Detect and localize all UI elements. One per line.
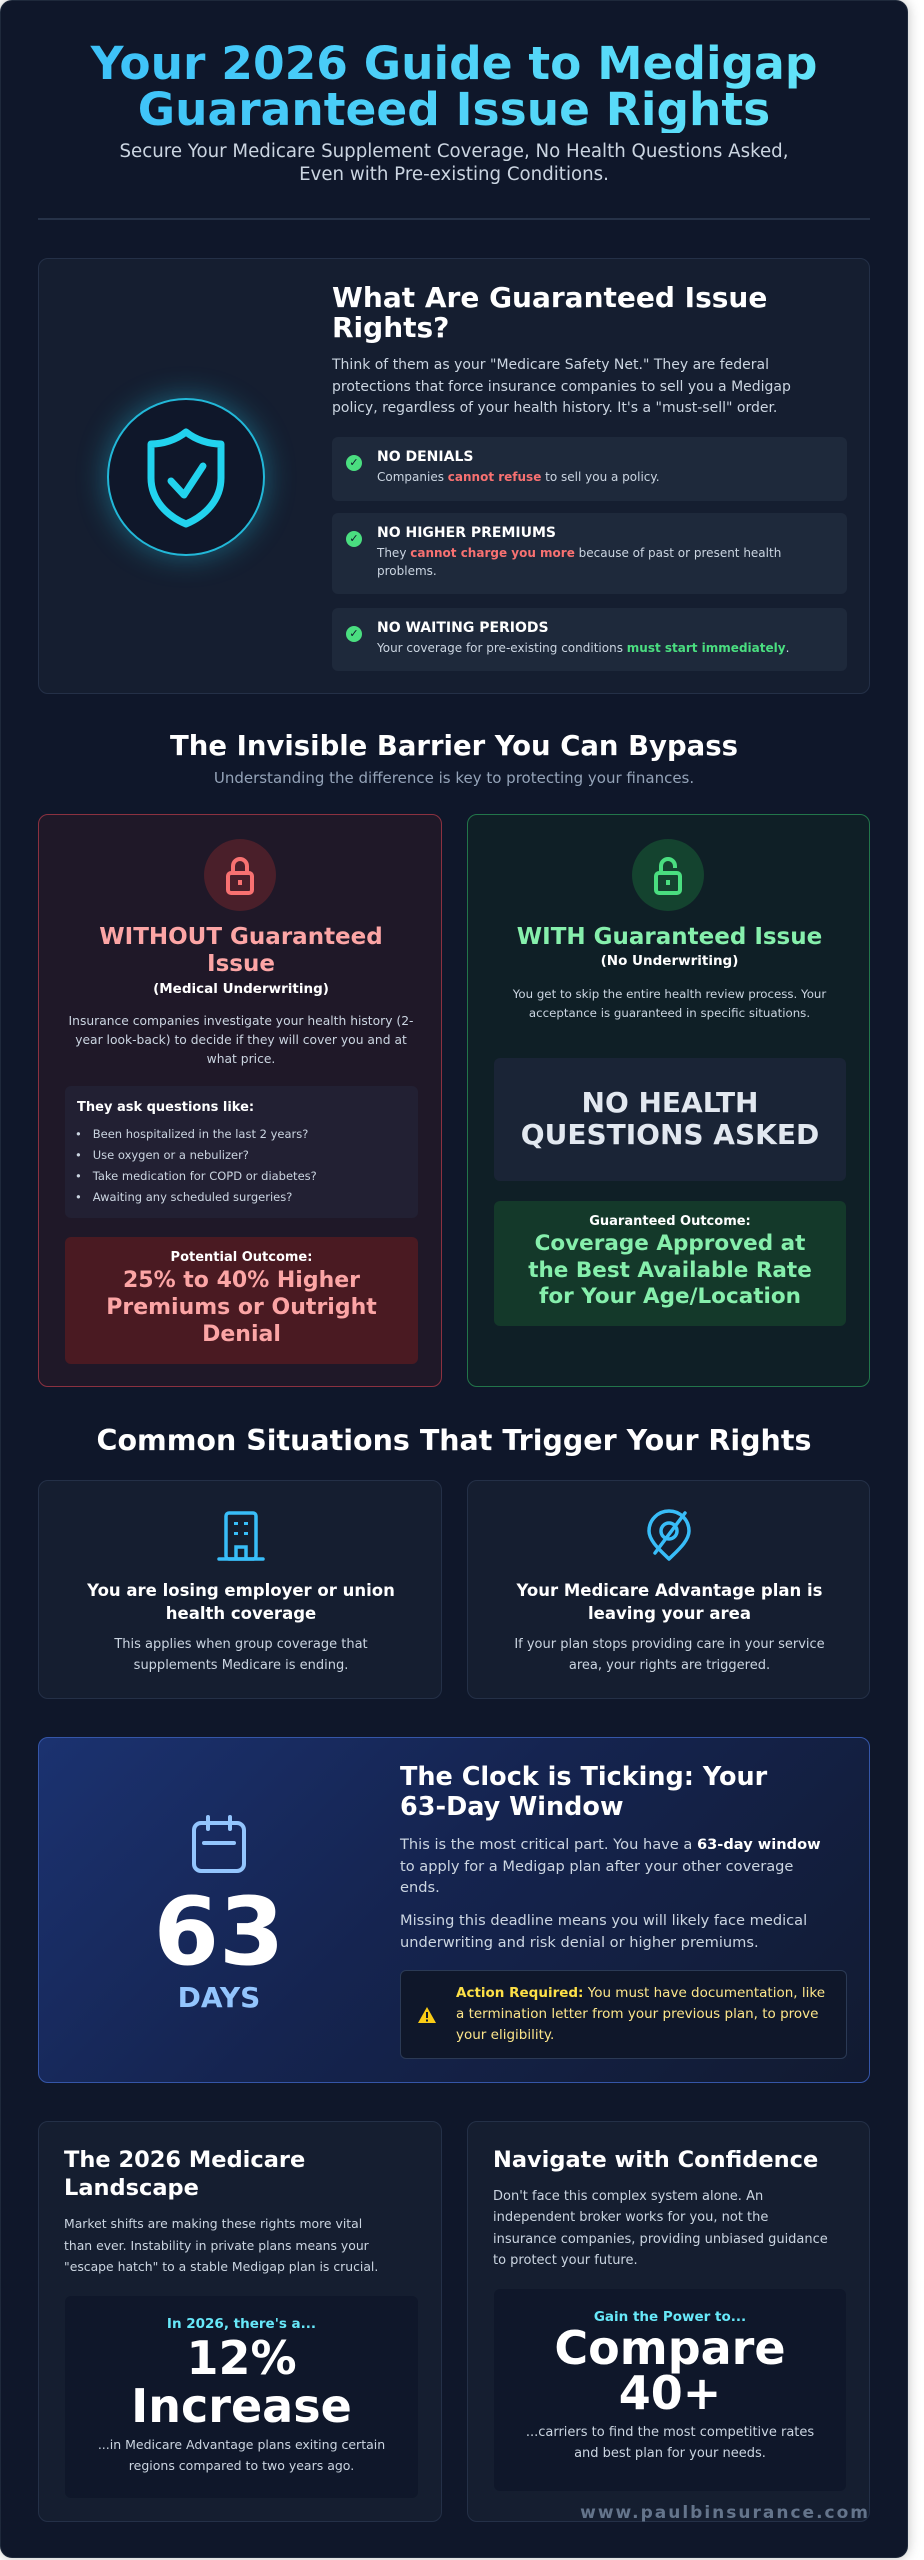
icon: shield <box>107 398 265 556</box>
stat box: 12% increase: ...in Medicare Advantage plans exiting certain <box>98 2437 385 2452</box>
item: no higher premiums: ✓ <box>349 532 359 545</box>
stat box: 12% increase: regions compared to two years ago. <box>129 2458 354 2473</box>
title <box>0 41 908 133</box>
no health questions box: QUESTIONS ASKED <box>521 1118 819 1151</box>
outcome box: Potential Outcome: <box>171 1250 312 1265</box>
icon: location off <box>647 1509 691 1561</box>
text: than ever. Instability in private plans means your <box>64 2238 369 2252</box>
heading: What Are Guaranteed Issue Rights? <box>332 281 767 344</box>
outcome box <box>494 1201 846 1326</box>
big number: 63 <box>154 1878 284 1987</box>
item: no higher premiums: NO HIGHER PREMIUMS <box>377 525 556 541</box>
panel: with guaranteed issue: (No Underwriting) <box>601 953 738 969</box>
stat box: compare 40+: Gain the Power to... <box>594 2309 746 2325</box>
text: Don't face this complex system alone. An <box>493 2189 763 2204</box>
text: description: Think of them as your "Medicare Safety Net." They are federal protections that force insurance companies to sell you a Medigap policy, regardless of your health history. It's a "must-sell" order. <box>332 357 791 416</box>
panel: 63-day window <box>38 1737 870 2083</box>
icon: calendar <box>192 1815 246 1873</box>
text: "escape hatch" to a stable Medigap plan is crucial. <box>64 2259 378 2274</box>
item: no waiting periods: ✓ <box>349 627 359 640</box>
callout: action required: Action Required: You must have documentation, like a termination letter from your previous plan, to prove your eligibility. <box>456 1985 825 2043</box>
text: to protect your future. <box>493 2253 638 2268</box>
card: employer coverage <box>38 1480 442 1699</box>
stat box: compare 40+: and best plan for your needs. <box>574 2446 766 2461</box>
item: no denials: ✓ <box>349 456 359 469</box>
subtitle: Secure Your Medicare Supplement Coverage, No Health Questions Asked, <box>120 141 788 162</box>
item: no waiting periods: Your coverage for pre-existing conditions must start immediately. <box>377 641 789 655</box>
item: no waiting periods <box>332 608 847 671</box>
title: WITH Guaranteed Issue <box>517 924 822 950</box>
title: WITHOUT Guaranteed Issue <box>99 924 383 977</box>
no health questions box <box>494 1058 846 1181</box>
text <box>400 1836 821 1896</box>
panel: 2026 medicare landscape <box>38 2121 442 2522</box>
title: Your Medicare Advantage plan is leaving your area <box>516 1581 822 1623</box>
icon: warning <box>418 2007 436 2023</box>
panel: 63-day window: Missing this deadline means you will likely face medical underwriting and risk denial or higher premiums. <box>400 1912 807 1950</box>
text: ends. <box>400 1879 440 1896</box>
title: You are losing employer or union health coverage <box>87 1581 395 1623</box>
outcome box: Guaranteed Outcome: <box>589 1214 751 1229</box>
heading: Navigate with Confidence <box>493 2147 818 2173</box>
text: to apply for a Medigap plan after your other coverage <box>400 1858 793 1874</box>
card: advantage plan leaving <box>467 1480 870 1699</box>
heading: The Clock is Ticking: Your <box>400 1762 767 1792</box>
heading: common situations: Common Situations That Trigger Your Rights <box>97 1424 811 1457</box>
item: no higher premiums <box>332 513 847 594</box>
title: Guaranteed Issue Rights <box>138 83 770 136</box>
text: This is the most critical part. You have a 63-day window <box>400 1836 821 1853</box>
heading: Landscape <box>64 2175 199 2201</box>
questions box: • Use oxygen or a nebulizer? <box>75 1148 249 1162</box>
heading: 63-Day Window <box>400 1792 624 1822</box>
description: If your plan stops providing care in your service area, your rights are triggered. <box>514 1637 825 1673</box>
heading: The 2026 Medicare <box>64 2147 305 2173</box>
stat box: compare 40+: ...carriers to find the most competitive rates <box>526 2425 814 2440</box>
text: insurance companies, providing unbiased guidance <box>493 2232 828 2247</box>
watermark: www.paulbinsurance.com <box>580 2503 870 2523</box>
subheading: Understanding the difference is key to protecting your finances. <box>214 769 694 787</box>
icon: building <box>217 1511 265 1561</box>
heading <box>64 2147 305 2201</box>
callout: action required <box>400 1970 847 2059</box>
questions box: • Take medication for COPD or diabetes? <box>75 1169 317 1183</box>
heading: invisible barrier: The Invisible Barrier You Can Bypass <box>170 730 738 762</box>
text: independent broker works for you, not the <box>493 2210 768 2225</box>
item: no denials: NO DENIALS <box>377 449 473 465</box>
stat box: 12% increase: 12% <box>186 2331 297 2385</box>
item: no denials <box>332 437 847 501</box>
stat box: compare 40+: 40+ <box>619 2366 721 2420</box>
item: no higher premiums: They cannot charge you more because of past or present health problems. <box>377 546 781 578</box>
item: no waiting periods: NO WAITING PERIODS <box>377 620 549 636</box>
description: You get to skip the entire health review process. Your acceptance is guaranteed in specific situations. <box>513 987 826 1020</box>
description: This applies when group coverage that supplements Medicare is ending. <box>114 1637 368 1673</box>
panel: without guaranteed issue: (Medical Underwriting) <box>153 981 329 997</box>
text <box>64 2216 378 2274</box>
panel: what are guaranteed issue rights <box>38 258 870 694</box>
stat box: 12% increase: Increase <box>131 2379 352 2433</box>
stat box: compare 40+: Compare <box>554 2321 786 2375</box>
questions box: • Awaiting any scheduled surgeries? <box>75 1190 292 1204</box>
days label: DAYS <box>178 1981 260 2014</box>
no health questions box: NO HEALTH <box>582 1086 758 1119</box>
stat box: compare 40+ <box>494 2289 846 2491</box>
title: Your 2026 Guide to Medigap <box>91 37 817 90</box>
outcome box <box>65 1237 418 1364</box>
text: Market shifts are making these rights more vital <box>64 2216 362 2231</box>
text <box>493 2189 828 2268</box>
item: no denials: Companies cannot refuse to sell you a policy. <box>377 470 660 484</box>
heading <box>400 1762 768 1822</box>
outcome box: Coverage Approved at the Best Available Rate for Your Age/Location <box>528 1231 812 1309</box>
description: Insurance companies investigate your health history (2-year look-back) to decide if they will cover you and at what price. <box>69 1014 413 1066</box>
panel: without guaranteed issue <box>38 814 442 1387</box>
panel: with guaranteed issue <box>467 814 870 1387</box>
stat box: 12% increase: In 2026, there's a... <box>167 2316 316 2332</box>
panel: navigate with confidence <box>467 2121 870 2522</box>
icon: unlocked <box>632 839 704 911</box>
subtitle: Even with Pre-existing Conditions. <box>299 164 609 185</box>
questions box: • Been hospitalized in the last 2 years? <box>75 1127 308 1141</box>
questions box: They ask questions like: <box>77 1100 254 1115</box>
stat box: 12% increase <box>65 2296 418 2498</box>
questions box <box>65 1086 418 1218</box>
icon: locked <box>204 839 276 911</box>
subtitle <box>120 141 788 185</box>
outcome box: 25% to 40% Higher Premiums or Outright Denial <box>106 1268 377 1347</box>
